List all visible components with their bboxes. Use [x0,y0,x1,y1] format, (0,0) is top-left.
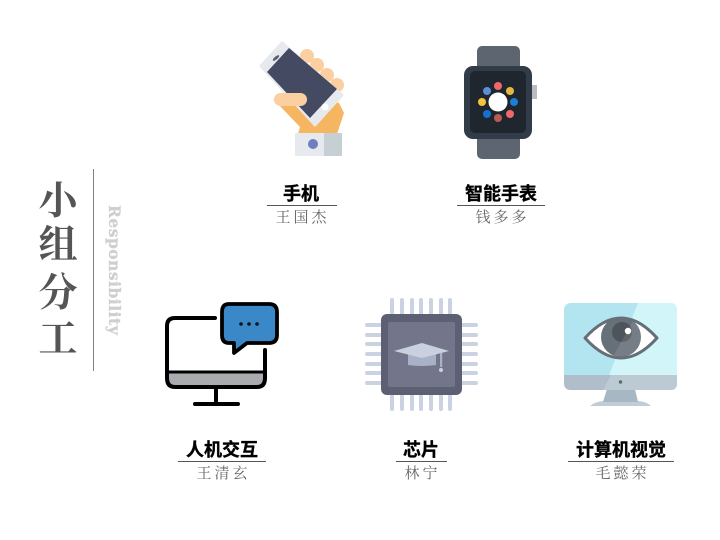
title: 小组分工: 分 [38,272,78,315]
icon: chip with graduation cap [365,298,478,411]
label: 手机 王国杰 [267,184,337,226]
title: 小组分工: 工 [38,318,78,361]
label: 计算机视觉 毛懿荣: 毛懿荣 [595,466,650,482]
label: 芯片 林宁: 林宁 [404,466,440,482]
icon: monitor with eye [564,303,677,406]
title: 小组分工: 小 [38,180,78,223]
label: 智能手表 钱多多: 智能手表 [465,184,537,204]
label: 计算机视觉 毛懿荣 [568,440,674,482]
label: 智能手表 钱多多: 钱多多 [475,210,530,226]
label: 芯片 林宁 [396,440,447,482]
icon: computer with chat bubble [165,302,279,406]
label: 手机 王国杰: 手机 [283,184,319,204]
label: 芯片 林宁: 芯片 [403,440,439,460]
title: 小组分工 [38,180,78,361]
label: 人机交互 王清玄 [178,440,266,482]
title: 小组分工: 组 [38,224,78,267]
label: 人机交互 王清玄: 人机交互 [186,440,258,460]
label: 计算机视觉 毛懿荣: 计算机视觉 [576,440,666,460]
icon: smart watch [464,46,537,159]
label: 人机交互 王清玄: 王清玄 [196,466,250,482]
label: 智能手表 钱多多 [457,184,545,226]
label: 手机 王国杰: 王国杰 [275,210,330,226]
subtitle: Responsibility: Responsibility [105,205,124,335]
vertical divider line [93,169,94,371]
icon: hand holding phone [260,42,344,156]
